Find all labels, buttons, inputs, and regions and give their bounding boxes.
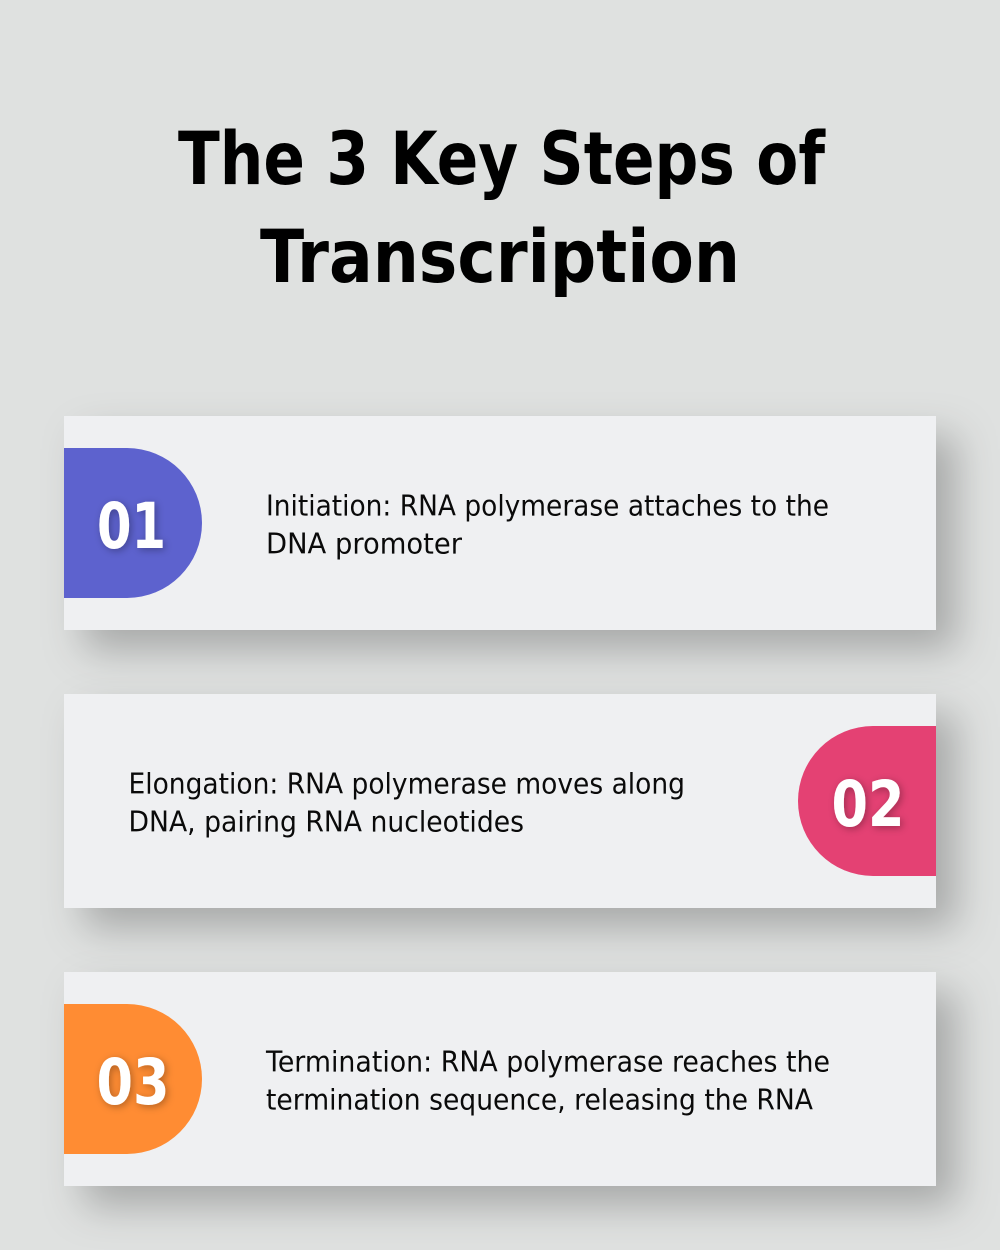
title bbox=[178, 117, 826, 300]
text: elongation: Elongation: RNA polymerase moves along bbox=[128, 768, 685, 800]
badge 03 bbox=[64, 1004, 202, 1154]
text: elongation: DNA, pairing RNA nucleotides bbox=[128, 806, 524, 838]
text: initiation: Initiation: RNA polymerase attaches to the bbox=[266, 490, 829, 522]
card background 1 bbox=[64, 416, 936, 630]
panel: step 3 termination bbox=[64, 972, 936, 1186]
card background 2 bbox=[64, 694, 936, 908]
title: The 3 Key Steps of bbox=[178, 117, 826, 202]
text: termination: termination sequence, releasing the RNA bbox=[266, 1084, 813, 1116]
text: initiation: DNA promoter bbox=[266, 528, 462, 560]
panel: step 1 initiation bbox=[64, 416, 936, 630]
title: Transcription bbox=[260, 215, 740, 300]
text: termination bbox=[265, 1046, 830, 1116]
text: termination: Termination: RNA polymerase reaches the bbox=[265, 1046, 830, 1078]
panel: step 2 elongation bbox=[64, 694, 936, 908]
text: initiation bbox=[266, 490, 829, 560]
text: elongation bbox=[128, 768, 685, 838]
badge 01 bbox=[64, 448, 202, 598]
badge 02 bbox=[798, 726, 936, 876]
card background 3 bbox=[64, 972, 936, 1186]
badge 03: 03 bbox=[96, 1046, 170, 1119]
badge 02: 02 bbox=[832, 768, 904, 841]
badge 01: 01 bbox=[97, 490, 166, 563]
